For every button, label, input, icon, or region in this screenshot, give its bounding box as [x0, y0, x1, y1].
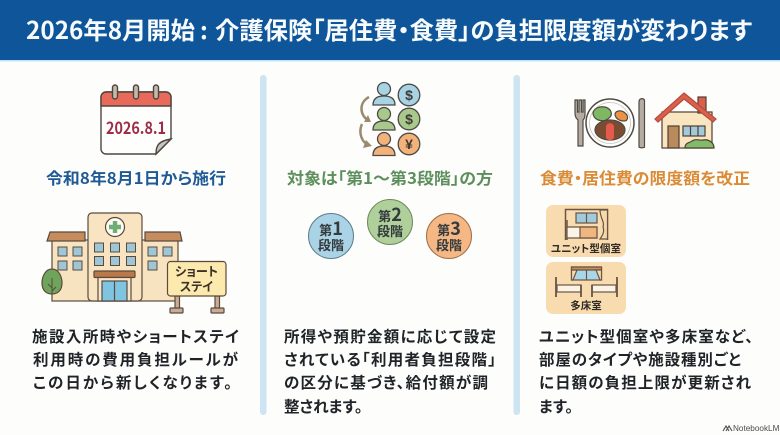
sign label: short stay — [175, 261, 218, 295]
text block: right description: 部屋のタイプや施設種別ごと — [539, 348, 741, 370]
text block: left description: 利用時の費用負担ルールが — [33, 348, 239, 370]
text block: left description: 施設入所時やショートステイ — [32, 325, 239, 347]
badge: stage 2: 段階 — [377, 221, 403, 240]
text block: center description: されている「利用者負担段階」 — [284, 348, 496, 370]
icon: care facility building — [42, 213, 226, 313]
badge: stage 1: 第1 — [319, 215, 343, 241]
heading: target stages: 対象は「第1〜第3段階」の方 — [287, 165, 493, 189]
title: 2026年8月開始 — [26, 11, 195, 46]
card: multi-bed room: 多床室 — [570, 298, 602, 313]
card: multi-bed room — [546, 262, 626, 314]
icon: people and coins: $ — [405, 111, 413, 127]
title: 介護保険「居住費・食費」の負担限度額が変わります — [215, 11, 752, 46]
sign label: short stay: ステイ — [179, 276, 213, 295]
text block: center description: 所得や預貯金額に応じて設定 — [284, 325, 496, 347]
text block: right description: ます。 — [539, 395, 573, 417]
badge: stage 2 — [368, 200, 412, 244]
text block: center description: の区分に基づき、給付額が調 — [284, 371, 488, 393]
text block: left description — [32, 325, 239, 393]
icon: calendar — [101, 85, 171, 154]
badge: stage 3: 第3 — [437, 215, 461, 241]
text block: left description: この日から新しくなります。 — [33, 371, 232, 393]
icon: people and coins — [360, 82, 420, 156]
badge: stage 1 — [308, 214, 354, 258]
text block: right description: ユニット型個室や多床室など、 — [539, 325, 753, 347]
card: unit private room — [546, 205, 626, 257]
sign label: short stay: ショート — [175, 261, 218, 280]
panel: eligible people — [284, 82, 496, 417]
icon: meal plate with cutlery — [575, 99, 644, 148]
text block: center description — [284, 325, 496, 417]
card: unit private room: ユニット型個室 — [551, 241, 621, 256]
text block: right description: に日額の負担上限が更新され — [539, 371, 752, 393]
heading: revision of limits: 食費・居住費の限度額を改正 — [540, 165, 750, 189]
watermark: NotebookLM: NotebookLM — [733, 424, 780, 433]
text block: right description — [539, 325, 753, 417]
icon: people and coins: ¥ — [405, 136, 413, 152]
badge: stage 3: 段階 — [436, 235, 462, 254]
icon: people and coins: $ — [405, 87, 413, 103]
panel: start date — [32, 85, 239, 393]
badge: stage 2: 第2 — [378, 201, 402, 227]
badge: stage 1: 段階 — [318, 235, 344, 254]
title: : — [200, 11, 208, 46]
panel: revised limits — [539, 93, 753, 417]
icon: calendar: 2026.8.1 — [106, 115, 166, 139]
header banner — [0, 0, 780, 62]
icon: house — [655, 93, 716, 148]
heading: effective date: 令和8年8月1日から施行 — [46, 165, 226, 189]
text block: center description: 整されます。 — [284, 395, 363, 417]
badge: stage 3 — [426, 214, 472, 258]
